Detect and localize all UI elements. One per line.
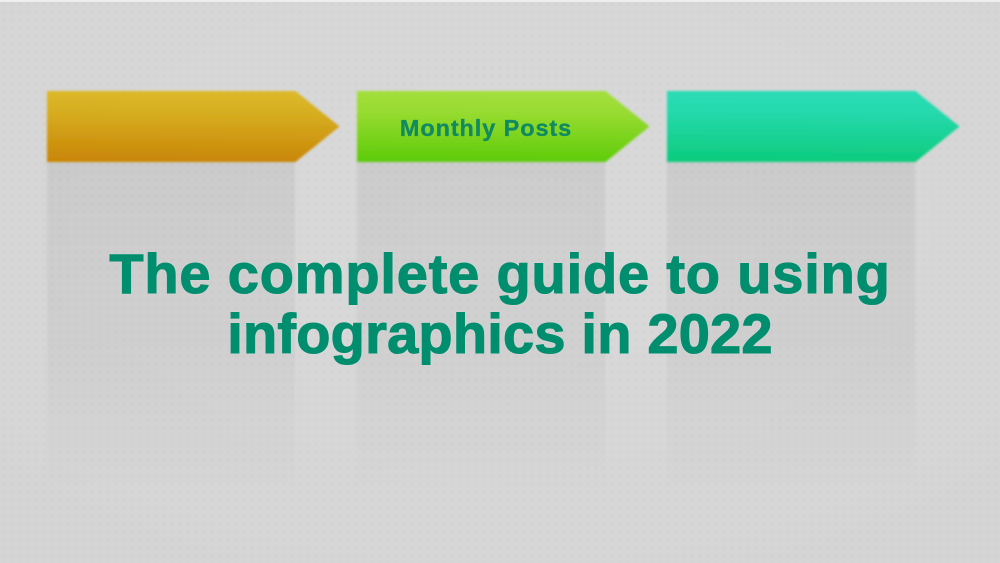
arrow: green: [357, 91, 650, 162]
title: infographics in 2022: [227, 302, 773, 364]
title: The complete guide to using: [109, 242, 891, 305]
title: [109, 242, 891, 365]
column: first: [47, 160, 295, 490]
arrow: orange: [47, 91, 340, 162]
column: third: [667, 160, 915, 490]
column: second: [357, 160, 605, 490]
arrow label: Monthly Posts: [400, 115, 572, 141]
arrow: teal: [667, 91, 960, 162]
